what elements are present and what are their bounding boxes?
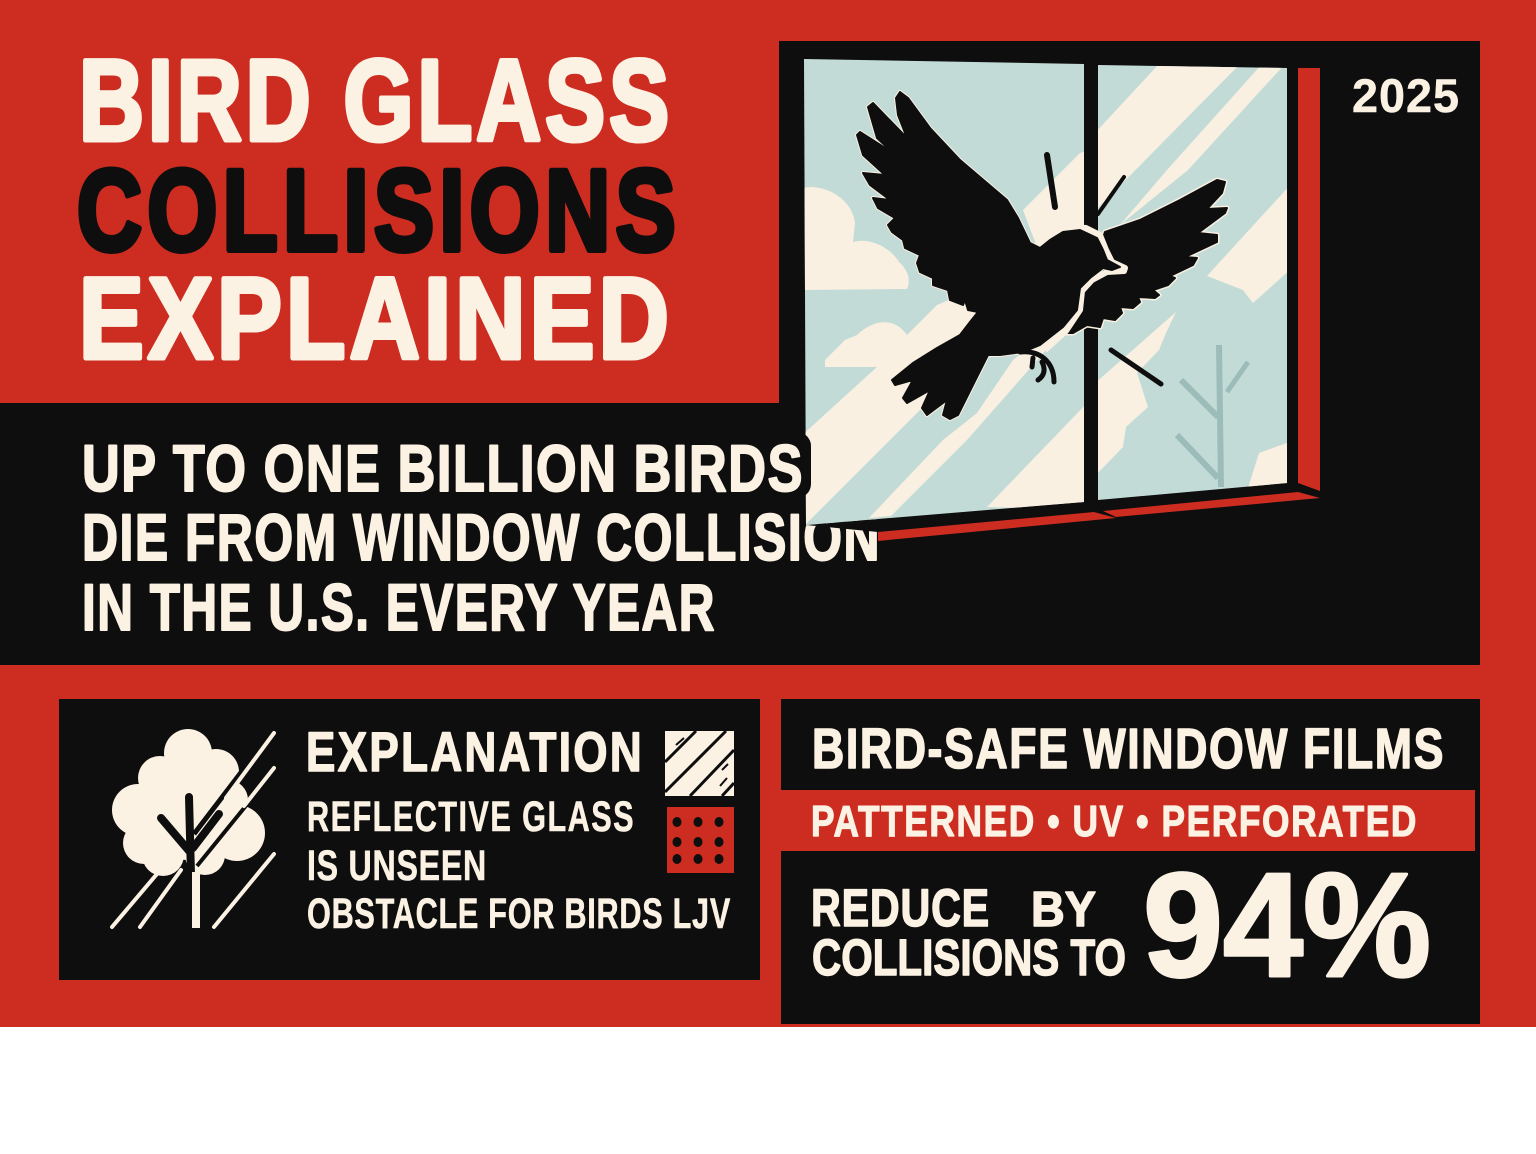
- head outline: [1045, 227, 1125, 350]
- reduce collisions text: [811, 879, 1126, 986]
- tree reflection: [1177, 345, 1248, 487]
- statistic line 3: IN THE U.S. EVERY YEAR: [82, 570, 716, 644]
- title: EXPLAINED: [79, 255, 673, 383]
- title: [77, 37, 681, 383]
- red sill: [878, 492, 1320, 541]
- reduce collisions text: REDUCE: [811, 879, 990, 938]
- title: COLLISIONS: [77, 147, 681, 275]
- icon: patterned film swatch: [665, 731, 734, 796]
- impact lines: [1047, 155, 1161, 384]
- statistic line 2 (partly hidden by window): DIE FROM WINDOW COLLISION: [82, 500, 881, 574]
- panel: explanation: [59, 699, 760, 980]
- left pane: [800, 55, 1090, 530]
- reduce collisions text: COLLISIONS TO: [812, 929, 1126, 986]
- body and left wing: [857, 92, 1120, 419]
- body text: OBSTACLE FOR BIRDS LJV: [307, 890, 731, 938]
- body text: IS UNSEEN: [307, 842, 487, 890]
- title: BIRD GLASS: [79, 37, 673, 165]
- stat: 94%: 94%: [1143, 843, 1431, 1008]
- right pane: [1094, 60, 1292, 505]
- main black panel: [0, 41, 1480, 665]
- year label: 2025: [1352, 69, 1460, 122]
- red frame side: [1298, 68, 1320, 491]
- bird: [857, 92, 1227, 419]
- statistic line 1: UP TO ONE BILLION BIRDS: [82, 431, 804, 505]
- feet: [1020, 352, 1054, 382]
- panel: bird-safe window films: [781, 699, 1480, 1024]
- icon: tree and glass: [112, 729, 275, 928]
- reduce collisions text: BY: [1031, 883, 1096, 937]
- heading: EXPLANATION: [306, 720, 644, 783]
- icon: perforated film swatch: [667, 807, 734, 873]
- right wing: [1067, 180, 1227, 333]
- body text: REFLECTIVE GLASS: [307, 793, 635, 841]
- window illustration: [800, 55, 1320, 541]
- frame strip over text: [806, 502, 1094, 532]
- body text: [307, 793, 731, 938]
